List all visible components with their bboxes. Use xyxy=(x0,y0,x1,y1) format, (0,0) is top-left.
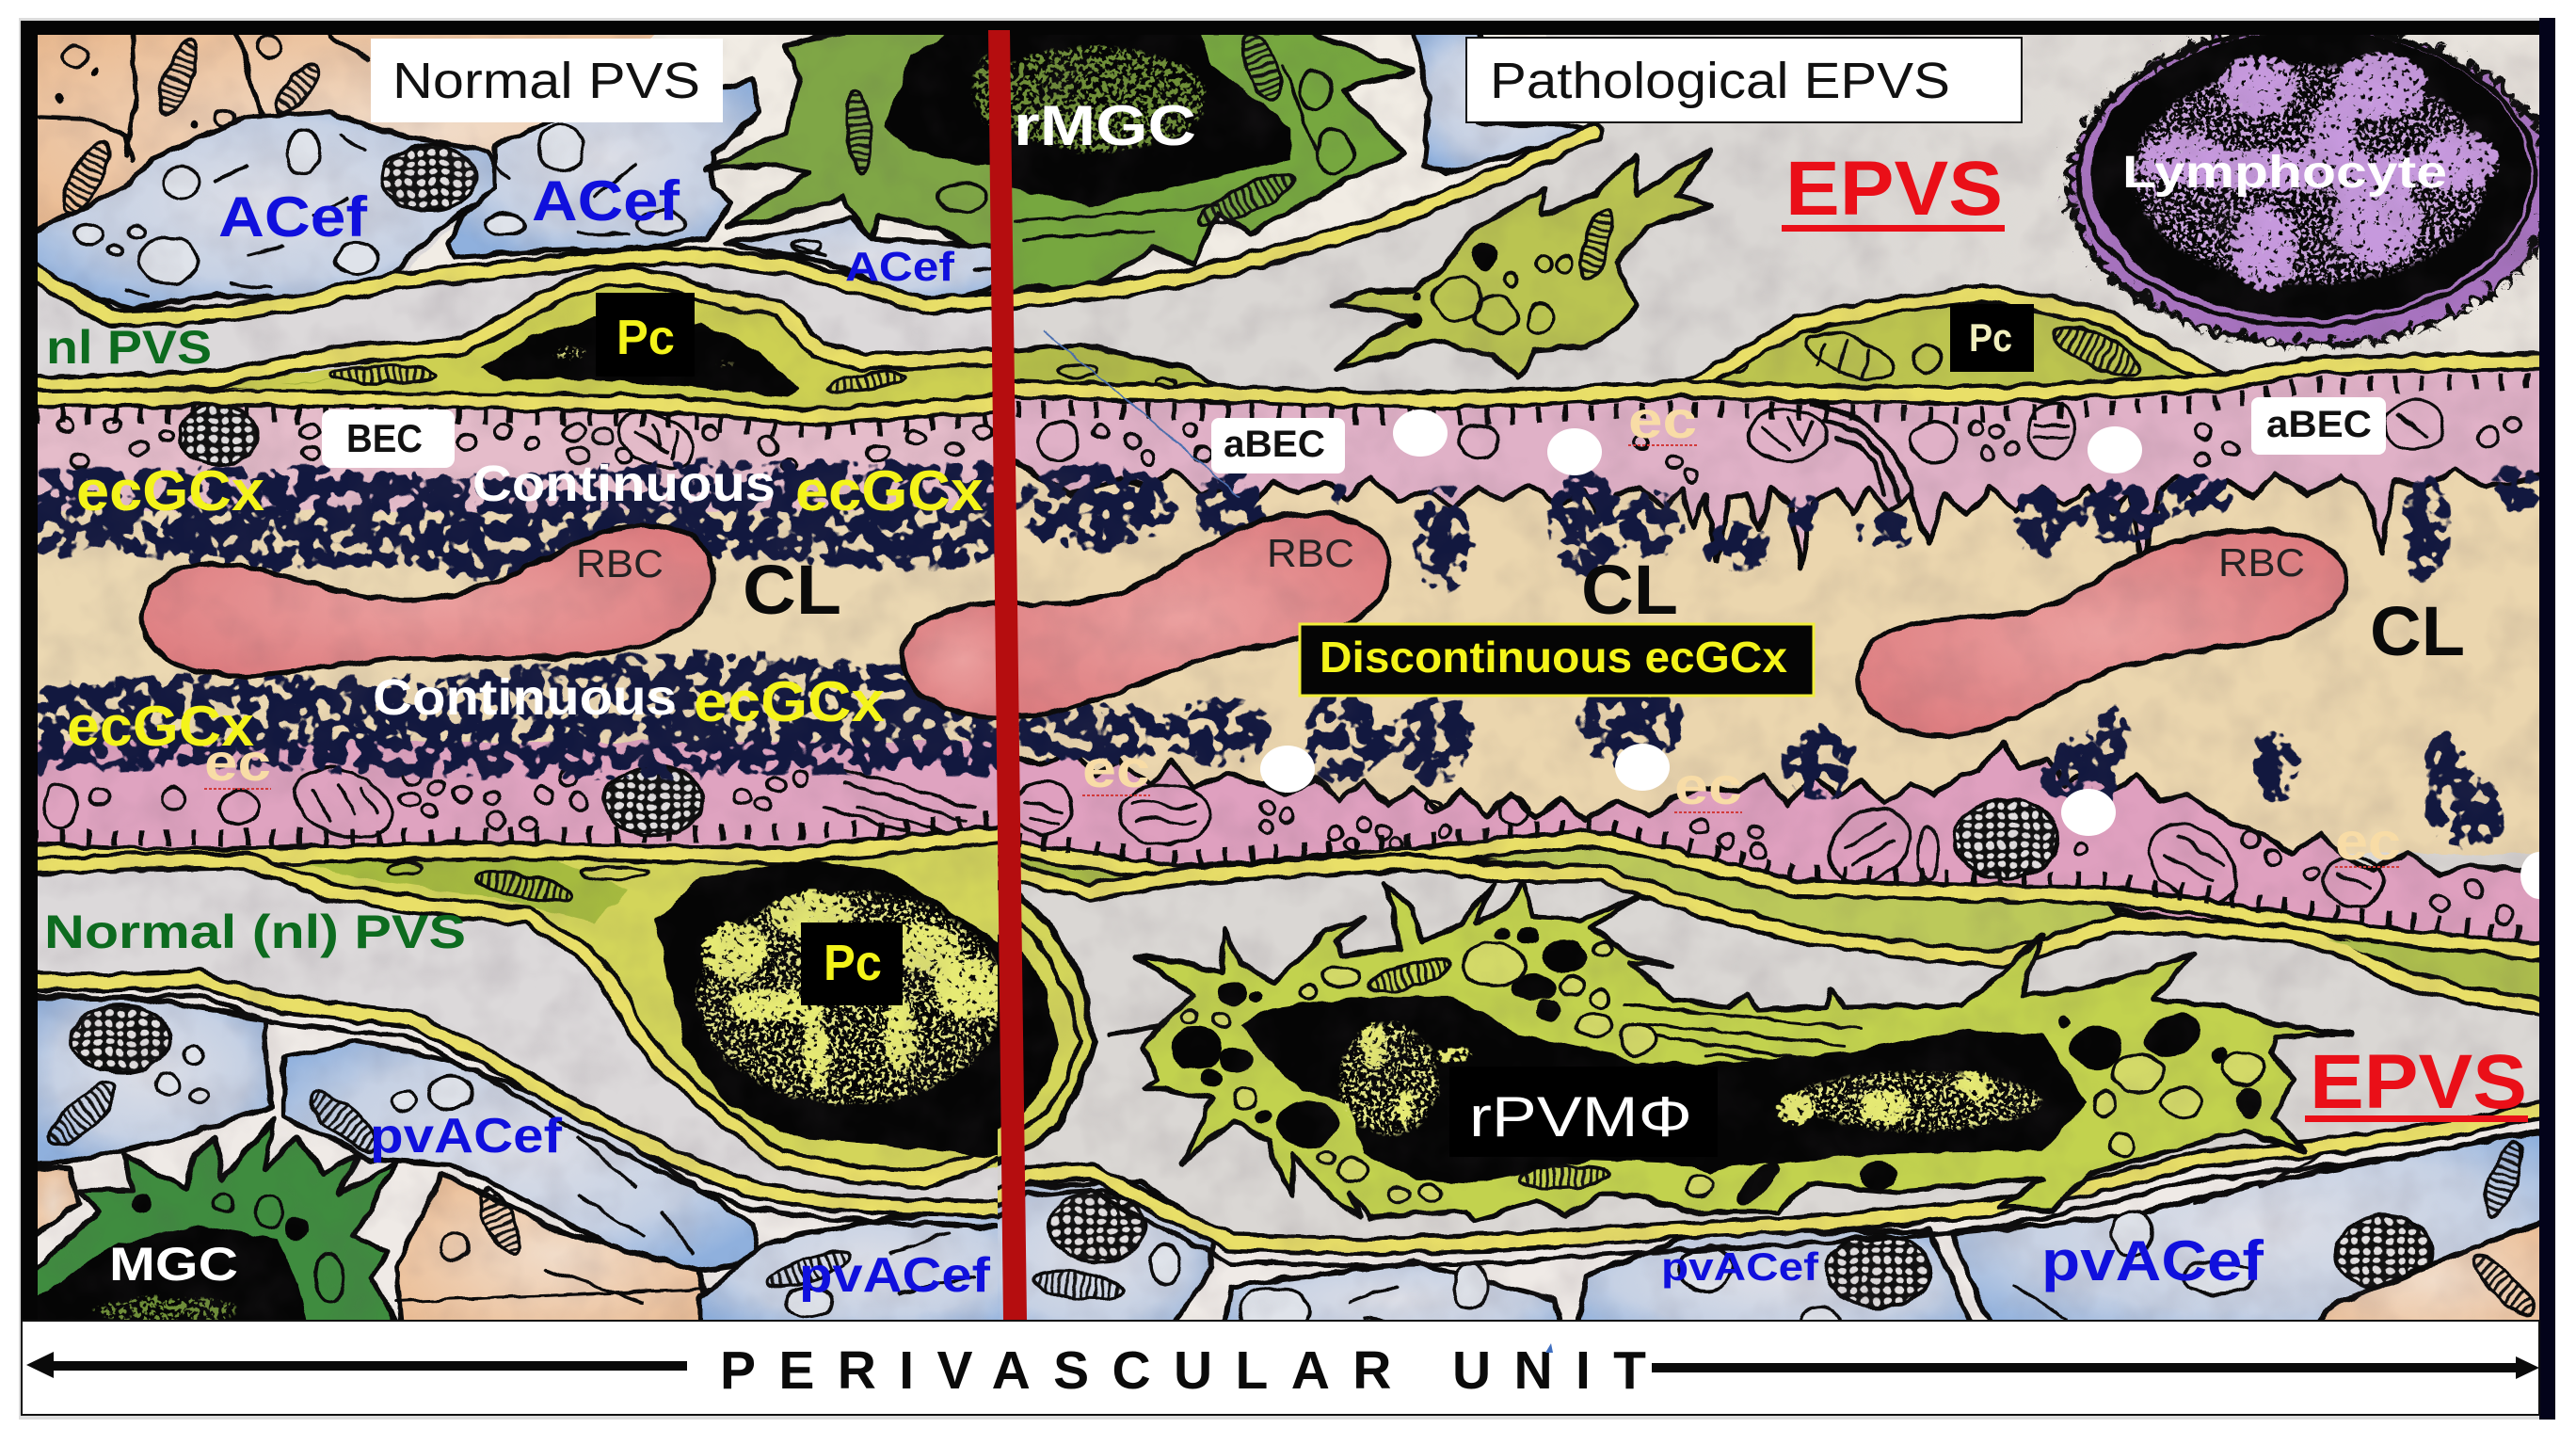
label: Normal (nl) PVS: Normal (nl) PVS xyxy=(44,906,466,958)
label: pericyte right: Pc xyxy=(1969,315,2012,360)
astrocyte end foot: upper middle xyxy=(449,79,760,257)
red blood cell 2 left part xyxy=(902,602,1023,717)
label: EPVS bottom with underline: EPVS xyxy=(2310,1039,2527,1125)
label: BEC xyxy=(322,409,455,468)
membrane reaching astrocyte xyxy=(982,132,1595,303)
label: RBC right: RBC xyxy=(2218,540,2305,585)
glycocalyx ecGCx: continuous upper layer xyxy=(38,456,995,582)
label: pvACef bottom middle: pvACef xyxy=(799,1248,991,1303)
label: ecGCx upper right: ecGCx xyxy=(795,459,984,522)
perivascular astrocyte end foot pvACef xyxy=(284,1042,760,1271)
lower vessel wall with large pericyte xyxy=(33,832,1093,1180)
label: Continuous upper: Continuous xyxy=(472,456,776,512)
arrow: right xyxy=(1652,1356,2539,1379)
label: Continuous lower: Continuous xyxy=(373,669,677,726)
lower tissue below enlarged space xyxy=(982,1113,2561,1348)
endothelium: upper activated xyxy=(966,366,2561,569)
lighter upper right space xyxy=(1771,30,2561,384)
label: pericyte upper left: Pc xyxy=(616,311,675,365)
label: large pericyte: Pc xyxy=(824,935,882,991)
white gaps: endothelial openings xyxy=(1260,409,2539,899)
lower basement membrane xyxy=(33,979,1016,1227)
lower capillary wall with pericyte strips xyxy=(973,824,2561,1009)
label: pvACef large right: pvACef xyxy=(2041,1229,2264,1292)
upper vessel wall with pericyte xyxy=(33,277,1016,417)
illustration: pathological enlarged perivascular space (right half) xyxy=(966,17,2561,1348)
divider: normal vs pathological xyxy=(988,30,1027,1321)
label: ACef large: ACef xyxy=(218,185,368,249)
label: ACef small: ACef xyxy=(845,244,954,290)
astrocyte neuropil lower xyxy=(30,1167,713,1335)
label: Discontinuous ecGCx xyxy=(1300,624,1814,696)
caption band: perivascular unit xyxy=(22,1321,2539,1415)
panel label: Normal PVS: Normal PVS xyxy=(392,53,700,109)
label: pericyte upper left xyxy=(596,293,695,377)
red blood cell 2 right part xyxy=(973,514,1390,718)
microglia MGC xyxy=(30,1121,405,1335)
caption text: PERIVASCULAR UNIT xyxy=(720,1340,1646,1401)
label: pvACef small right: pvACef xyxy=(1661,1244,1819,1289)
small stray blue mark xyxy=(1545,1343,1553,1353)
label: BEC: BEC xyxy=(346,416,423,460)
label: aBEC left xyxy=(1211,418,1345,473)
label: CL left: CL xyxy=(743,551,841,629)
astrocyte neuropil tissue xyxy=(38,35,654,227)
label: ec lower left: ec xyxy=(204,732,271,792)
capillary wall upper with pericytes xyxy=(973,294,2553,496)
panel label: Normal PVS xyxy=(371,39,723,122)
label: ec upper right: ec xyxy=(1628,390,1697,449)
label: RBC center: RBC xyxy=(1267,531,1354,575)
upper basement membrane xyxy=(33,255,1016,318)
illustration: normal perivascular space (left half) xyxy=(38,35,998,1320)
label: ecGCx upper left: ecGCx xyxy=(76,459,264,522)
label: CL right: CL xyxy=(2370,592,2465,670)
label: aBEC left: aBEC xyxy=(1224,424,1325,465)
lower basement membrane xyxy=(982,1108,2553,1266)
panel label: Pathological EPVS: Pathological EPVS xyxy=(1490,53,1950,109)
large pericyte ring right of divider xyxy=(966,865,1094,1174)
label: aBEC right: aBEC xyxy=(2266,404,2372,445)
label: rPVMΦ xyxy=(1449,1067,1718,1157)
endothelium: lower activated xyxy=(966,742,2561,972)
background: perivascular space fluid xyxy=(38,152,998,1199)
small astrocyte process xyxy=(727,219,1023,300)
microglia rMGC left part xyxy=(703,35,991,245)
astrocyte end foot: bottom middle left xyxy=(700,1207,1036,1335)
lower tissue base xyxy=(30,986,1036,1348)
endothelium: upper continuous xyxy=(38,405,994,513)
astrocyte process behind pathological label xyxy=(1414,30,1595,173)
reactive microglia rMGC right part xyxy=(973,28,1414,297)
red blood cell 1 xyxy=(142,525,712,675)
perivascular macrophage rPVM body xyxy=(1111,882,2349,1220)
label: nl PVS: nl PVS xyxy=(46,321,212,374)
panel label: Pathological EPVS xyxy=(1466,38,2022,122)
label: Lymphocyte: Lymphocyte xyxy=(2122,148,2447,198)
lymphocyte xyxy=(2058,17,2550,340)
label: ACef middle: ACef xyxy=(532,169,680,233)
label: ecGCx lower left: ecGCx xyxy=(67,695,254,758)
background: enlarged perivascular space xyxy=(966,30,2561,1348)
astrocyte end foot: lower left xyxy=(30,996,271,1163)
capillary lumen xyxy=(966,461,2561,854)
label: rPVMΦ: rPVMΦ xyxy=(1469,1085,1692,1148)
label: rMGC: rMGC xyxy=(1014,94,1196,157)
glycocalyx ecGCx: discontinuous clusters xyxy=(1009,458,2547,854)
astrocyte end feet: lower row xyxy=(973,1131,2561,1343)
endothelium: lower continuous xyxy=(38,740,998,848)
capillary lumen xyxy=(38,508,997,744)
label: ec lower right: ec xyxy=(2335,811,2401,871)
label: EPVS top with underline: EPVS xyxy=(1785,146,2003,232)
label: pericyte right xyxy=(1950,304,2034,372)
label: ecGCx lower right: ecGCx xyxy=(694,670,885,733)
pale gap around reactive microglia xyxy=(982,30,1595,303)
label: RBC left: RBC xyxy=(576,541,664,586)
label: pvACef left: pvACef xyxy=(370,1109,563,1163)
label: aBEC right xyxy=(2251,397,2386,455)
glycocalyx ecGCx: continuous lower layer xyxy=(30,646,1036,784)
label: ec lower center: ec xyxy=(1674,756,1742,815)
astrocyte end foot: large xyxy=(30,112,502,308)
label: CL center: CL xyxy=(1581,551,1678,629)
label: Discontinuous ecGCx: Discontinuous ecGCx xyxy=(1320,633,1787,682)
label: ec lower near divider: ec xyxy=(1082,739,1150,798)
arrow: left xyxy=(26,1352,687,1378)
label: large pericyte xyxy=(801,923,903,1005)
activated perivascular cell xyxy=(1332,150,1713,379)
red blood cell 3 xyxy=(1859,531,2346,735)
label: MGC: MGC xyxy=(109,1238,238,1291)
pale gap around microglia xyxy=(408,35,952,271)
